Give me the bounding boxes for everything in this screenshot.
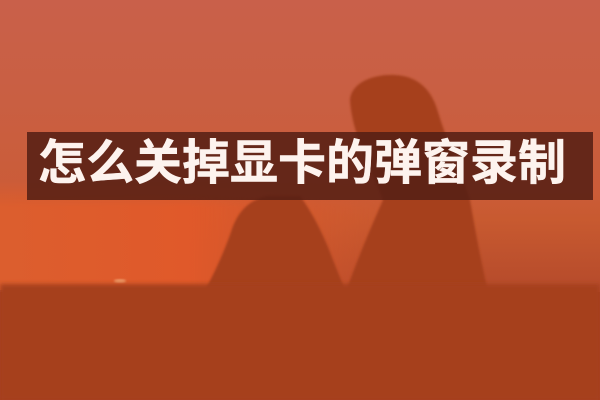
sun glow (0, 193, 352, 290)
sun highlight (114, 279, 126, 283)
sky (0, 0, 600, 292)
silhouette: seated person right (346, 75, 488, 292)
title: 怎么关掉显卡的弹窗录制 (38, 137, 566, 190)
ground (0, 284, 600, 400)
silhouette: seated person left (204, 196, 346, 292)
background: sunset scene with silhouettes (0, 0, 600, 290)
title band (27, 132, 593, 200)
